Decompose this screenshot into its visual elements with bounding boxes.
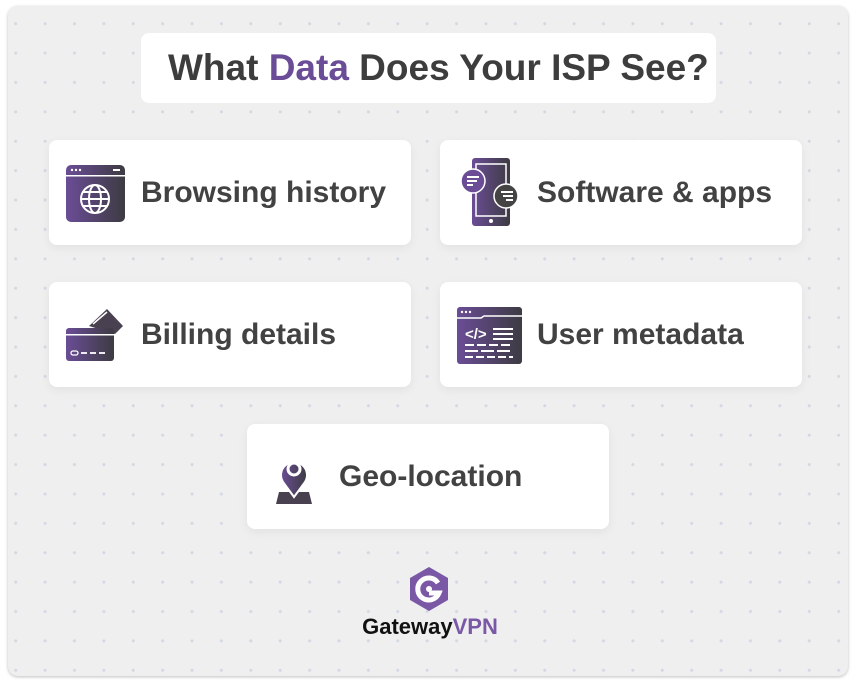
card: user metadata: User metadata (537, 318, 744, 350)
icon: hexagon G (410, 567, 448, 611)
card: browsing history: Browsing history (141, 176, 386, 208)
logo: GatewayVPN: GatewayVPN (362, 614, 498, 639)
card: geo-location: Geo-location (339, 460, 522, 492)
logo: GatewayVPN (362, 567, 498, 639)
icon: code window (457, 307, 522, 364)
icon: phone chat (462, 158, 518, 226)
card: billing details (49, 282, 411, 387)
icon: location pin (276, 464, 312, 504)
card: billing details: Billing details (141, 318, 336, 350)
title (141, 33, 716, 103)
card: software & apps: Software & apps (537, 176, 772, 208)
icon: credit cards (66, 309, 123, 361)
title: What Data Does Your ISP See? (168, 47, 709, 88)
card: software & apps (440, 140, 802, 245)
card: browsing history (49, 140, 411, 245)
card: user metadata (440, 282, 802, 387)
card: geo-location (247, 424, 609, 529)
icon: code window: </> (465, 326, 487, 343)
icon: browser globe (66, 165, 125, 222)
